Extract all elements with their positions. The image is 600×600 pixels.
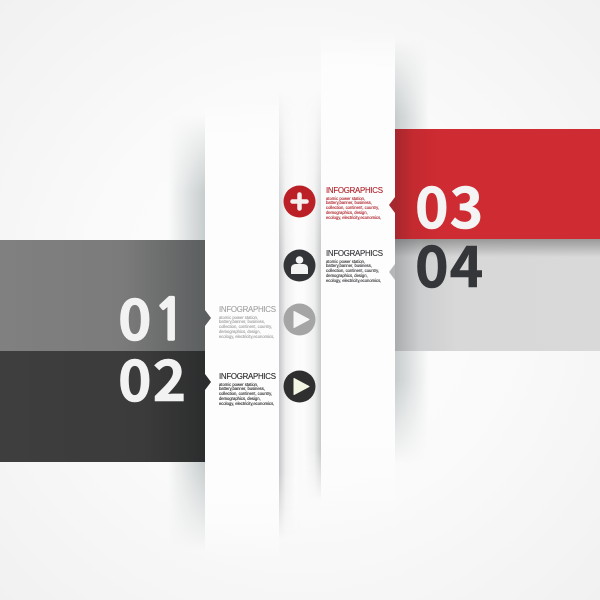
band 02: dark xyxy=(0,351,205,462)
band 01: gray xyxy=(0,240,205,351)
text block 02: demographics, design, xyxy=(219,396,261,401)
text block 03: ecology, electricity,economics, xyxy=(326,215,381,220)
text block 02 xyxy=(219,372,276,406)
white strip right xyxy=(321,30,395,520)
band 03: red xyxy=(395,129,600,239)
number 04: 04 xyxy=(415,222,484,304)
text block 01: collection, continent, country, xyxy=(219,324,272,329)
text block 04: battery,banner, business, xyxy=(326,263,372,268)
text block 03: INFOGRAPHICS xyxy=(326,186,383,195)
icon: person xyxy=(284,250,316,282)
text block 03: collection, continent, country, xyxy=(326,205,379,210)
number 02: 02 xyxy=(118,336,187,418)
text block 02: ecology, electricity,economics, xyxy=(219,401,274,406)
text block 04: INFOGRAPHICS xyxy=(326,249,383,258)
text block 01: ecology, electricity,economics, xyxy=(219,334,274,339)
text block 02: collection, continent, country, xyxy=(219,391,272,396)
shadow of left strip xyxy=(173,126,205,536)
shadow of right strip xyxy=(395,52,424,452)
text block 04: demographics, design, xyxy=(326,273,368,278)
text block 01: demographics, design, xyxy=(219,329,261,334)
text block 03: demographics, design, xyxy=(326,210,368,215)
pointer 03 xyxy=(389,197,395,213)
white strip left xyxy=(205,100,279,565)
band 04 top shadow xyxy=(395,239,600,257)
text block 04: collection, continent, country, xyxy=(326,268,379,273)
text block 04 xyxy=(326,249,383,283)
text block 02: INFOGRAPHICS xyxy=(219,372,276,381)
text block 02: atomic power station, xyxy=(219,382,258,386)
text block 04: ecology, electricity,economics, xyxy=(326,278,381,283)
icon: play dark xyxy=(284,370,316,402)
band 04: light gray xyxy=(395,239,600,351)
centre gap: right-edge shadow xyxy=(308,114,321,492)
text block 04: atomic power station, xyxy=(326,258,365,264)
text block 01: battery,banner, business, xyxy=(219,319,265,324)
text block 01 xyxy=(219,305,276,339)
pointer 02 xyxy=(205,374,211,390)
icon: play gray xyxy=(284,304,316,336)
text block 01: INFOGRAPHICS xyxy=(219,305,276,314)
text block 03: atomic power station, xyxy=(326,196,365,200)
text block 01: atomic power station, xyxy=(219,314,258,320)
number 01: 01 xyxy=(118,275,188,357)
icon: plus xyxy=(284,186,316,218)
pointer 04 xyxy=(389,264,395,280)
centre gap: left-edge shadow xyxy=(279,113,292,530)
number 03: 03 xyxy=(415,163,484,245)
text block 03: battery,banner, business, xyxy=(326,200,372,205)
text block 03 xyxy=(326,186,383,220)
pointer 01 xyxy=(205,310,211,326)
text block 02: battery,banner, business, xyxy=(219,386,265,391)
